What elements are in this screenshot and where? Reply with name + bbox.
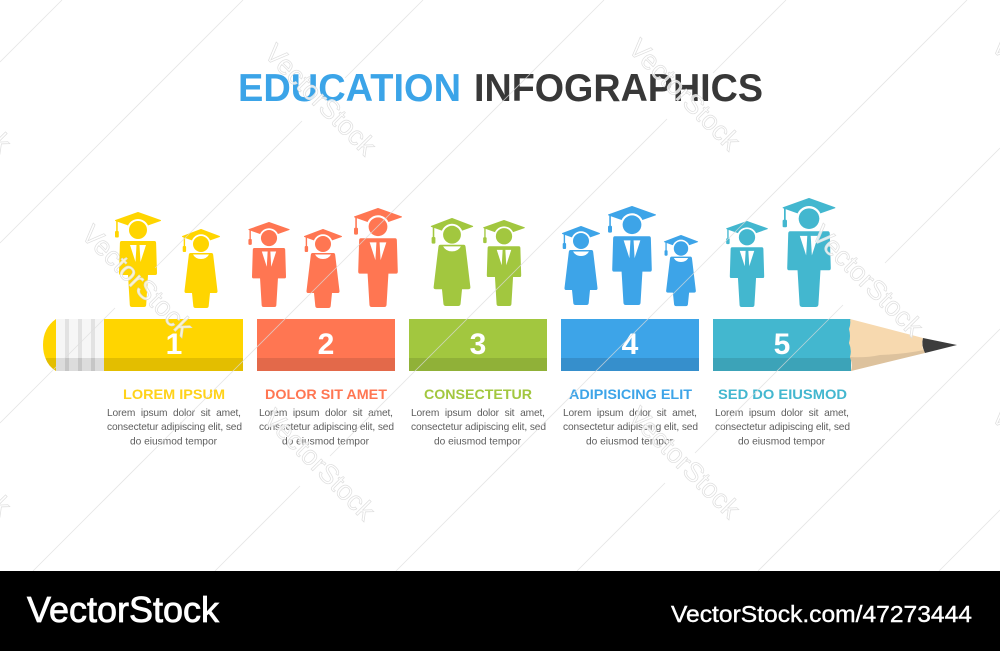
description 1: consectetur adipiscing elit, sed xyxy=(107,422,242,433)
graduate figure: man xyxy=(115,212,160,307)
description 5 xyxy=(715,408,850,448)
pencil segment 3: 3 xyxy=(470,328,486,361)
title xyxy=(238,67,763,110)
graduate figure: woman xyxy=(304,230,342,308)
graduate figure: man xyxy=(354,209,401,307)
pencil segment 2 xyxy=(257,319,395,371)
description 1: do eiusmod tempor xyxy=(130,436,218,448)
step 5: teal xyxy=(713,199,957,448)
graduate figure: woman xyxy=(664,235,698,306)
footer logo text: VectorStock xyxy=(27,589,220,630)
description 4: Lorem ipsum dolor sit amet, xyxy=(563,408,697,419)
graduate figure: woman xyxy=(182,230,220,308)
graduate figure: woman xyxy=(431,219,473,306)
description 2: consectetur adipiscing elit, sed xyxy=(259,422,394,433)
pencil segment 1 xyxy=(104,319,243,371)
title: EDUCATION xyxy=(238,67,461,110)
heading 4: ADIPISICING ELIT xyxy=(569,386,692,402)
watermarks: VectorStock xyxy=(259,38,382,161)
description 3: Lorem ipsum dolor sit amet, xyxy=(411,408,545,419)
watermarks: VectorStock xyxy=(806,219,929,342)
footer image id: VectorStock.com/47273444 xyxy=(671,601,972,627)
description 2: Lorem ipsum dolor sit amet, xyxy=(259,408,393,419)
description 1: Lorem ipsum dolor sit amet, xyxy=(107,408,241,419)
description 5: consectetur adipiscing elit, sed xyxy=(715,422,850,433)
pencil eraser end xyxy=(43,319,104,371)
step 4: blue xyxy=(561,207,699,448)
heading 5: SED DO EIUSMOD xyxy=(718,386,847,402)
description 4 xyxy=(563,408,698,448)
pencil tip xyxy=(849,319,957,371)
pencil segment 4: 4 xyxy=(622,328,639,361)
graduate figure: woman xyxy=(562,226,600,305)
watermarks: VectorStock xyxy=(623,401,746,524)
pencil segment 3 xyxy=(409,319,547,371)
pencil segment 5 xyxy=(713,319,851,371)
watermarks xyxy=(0,31,1000,526)
footer bar xyxy=(0,571,1000,651)
graduate figure: man xyxy=(726,221,767,307)
heading 3: CONSECTETUR xyxy=(424,386,532,402)
description 3: consectetur adipiscing elit, sed xyxy=(411,422,546,433)
watermarks: VectorStock xyxy=(76,219,199,342)
watermarks: VectorStock xyxy=(258,403,381,526)
heading 2: DOLOR SIT AMET xyxy=(265,386,387,402)
step 2: coral xyxy=(248,209,401,448)
description 2 xyxy=(259,408,394,448)
graduate figure: man xyxy=(248,222,289,307)
watermarks: VectorStock xyxy=(623,33,746,156)
pencil segment 1: 1 xyxy=(166,328,182,361)
step 1: yellow xyxy=(43,212,243,448)
graduate figure: man xyxy=(608,207,655,305)
description 4: do eiusmod tempor xyxy=(586,436,674,448)
graduate figure: man xyxy=(783,199,835,307)
description 2: do eiusmod tempor xyxy=(282,436,370,448)
description 3: do eiusmod tempor xyxy=(434,436,522,448)
title: INFOGRAPHICS xyxy=(474,67,763,110)
description 1 xyxy=(107,408,242,448)
description 4: consectetur adipiscing elit, sed xyxy=(563,422,698,433)
description 3 xyxy=(411,408,546,448)
heading 1: LOREM IPSUM xyxy=(123,386,225,402)
step 3: green xyxy=(409,219,547,448)
pencil segment 4 xyxy=(561,319,699,371)
pencil segment 2: 2 xyxy=(318,328,334,361)
graduate figure: man xyxy=(483,220,524,306)
pencil segment 5: 5 xyxy=(774,328,790,361)
description 5: Lorem ipsum dolor sit amet, xyxy=(715,408,849,419)
description 5: do eiusmod tempor xyxy=(738,436,826,448)
